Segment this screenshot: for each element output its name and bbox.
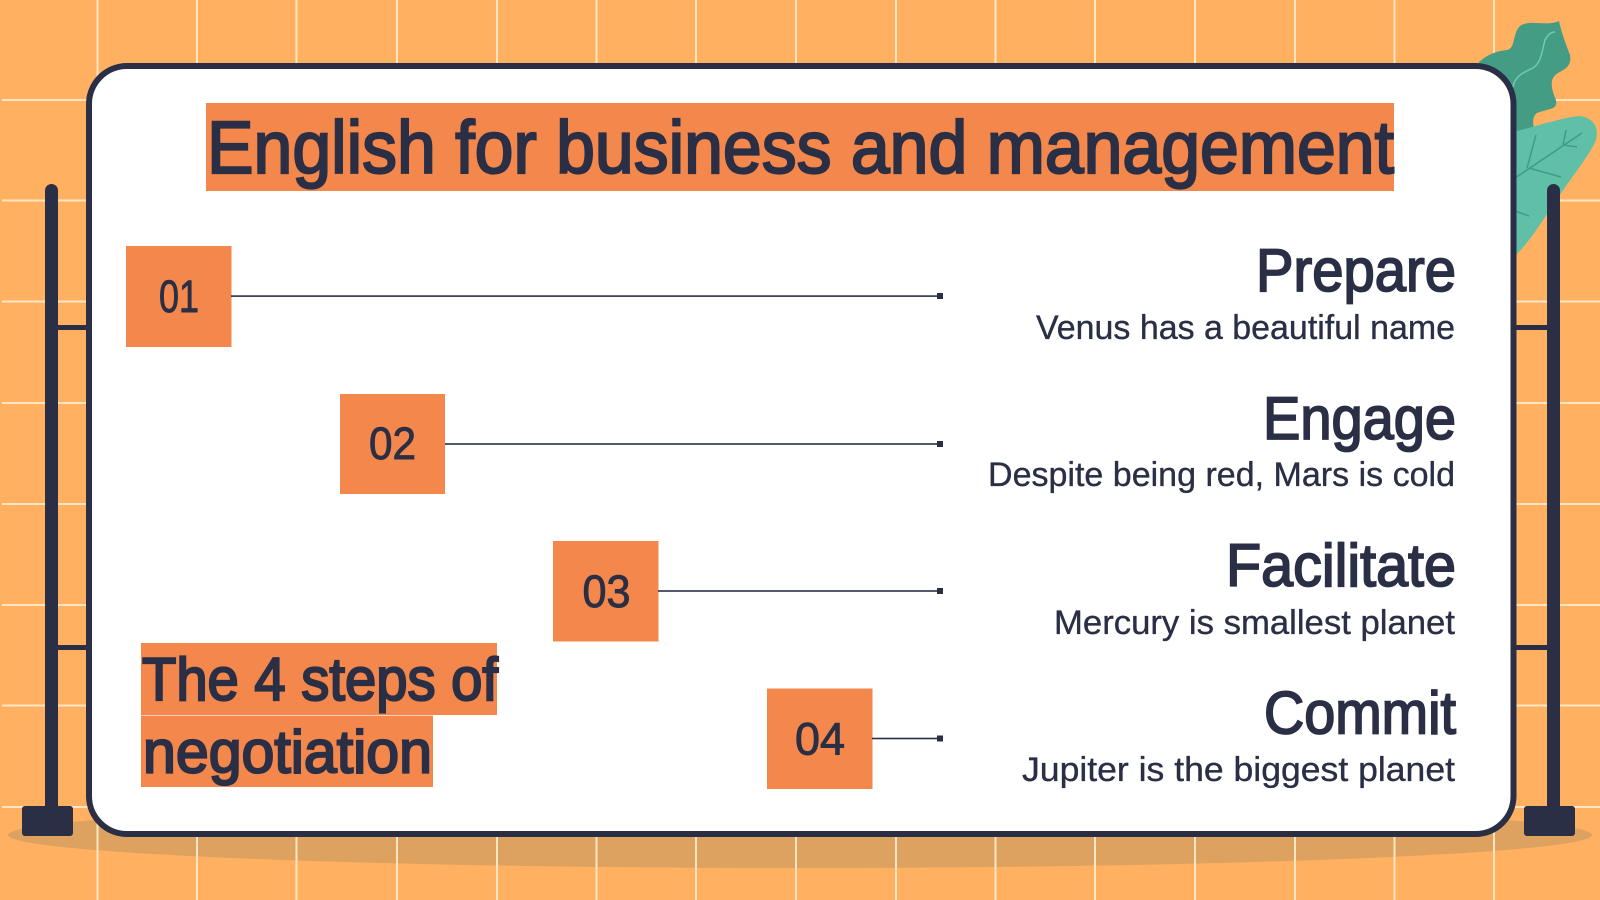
step 04: 04 (795, 714, 845, 764)
step 04: Commit (1264, 680, 1456, 746)
step 02: Engage (1263, 385, 1456, 452)
step 02: Despite being red, Mars is cold (988, 456, 1455, 494)
icon: leaves (1479, 21, 1597, 255)
right stand (1513, 184, 1575, 836)
step 01: Prepare (1256, 237, 1456, 304)
step 03 (553, 532, 1456, 642)
title: English for business and management (207, 106, 1394, 189)
subtitle: The 4 steps of (142, 646, 498, 713)
step 04 (767, 680, 1456, 789)
step 02 (340, 385, 1456, 494)
subtitle (141, 643, 498, 787)
left stand (22, 184, 90, 836)
step 01: Venus has a beautiful name (1036, 309, 1455, 347)
panel: white card (89, 66, 1514, 834)
step 03: Facilitate (1226, 532, 1456, 599)
step 04: Jupiter is the biggest planet (1022, 751, 1456, 789)
step 03: 03 (582, 566, 630, 617)
step 02: 02 (369, 418, 416, 469)
step 03: Mercury is smallest planet (1054, 604, 1456, 642)
step 01 (126, 237, 1456, 347)
subtitle: negotiation (143, 718, 432, 786)
step 01: 01 (159, 271, 199, 322)
